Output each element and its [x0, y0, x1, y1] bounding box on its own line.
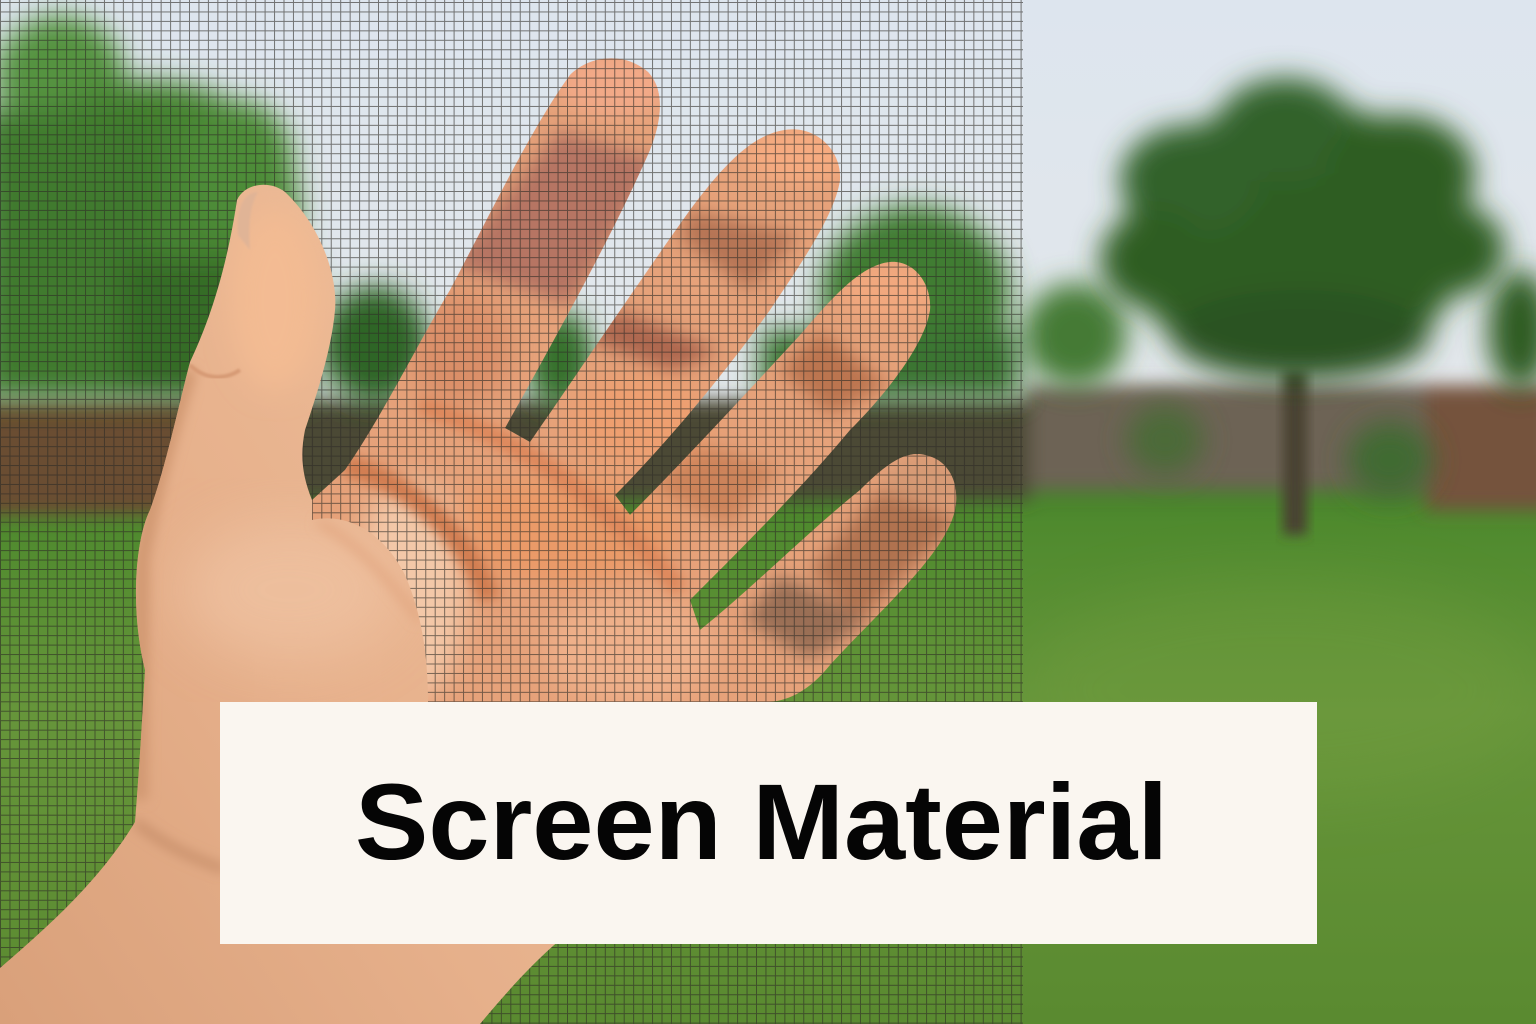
palm tones — [355, 295, 715, 705]
middle trees — [320, 205, 1020, 410]
thumb tone — [217, 238, 300, 370]
title: Screen Material — [355, 761, 1168, 882]
left tree — [0, 15, 310, 400]
finger tips — [560, 53, 965, 505]
title panel — [220, 702, 1317, 944]
fence — [0, 385, 1536, 515]
lawn — [0, 455, 1536, 1024]
hand in front of the mesh: thumb, heel and wrist — [0, 180, 570, 1024]
thumb nail — [238, 193, 256, 248]
left edge shading — [140, 370, 190, 800]
palm heel highlight — [185, 525, 384, 660]
creases — [190, 365, 240, 377]
window screen mesh — [0, 0, 1023, 1024]
lawn highlight — [1020, 580, 1536, 800]
sky — [0, 0, 1536, 500]
right tree — [1100, 78, 1505, 535]
dusky finger bands — [450, 130, 960, 660]
hand behind the mesh: fingers and palm — [300, 40, 980, 710]
distant bushes right — [1023, 270, 1536, 498]
